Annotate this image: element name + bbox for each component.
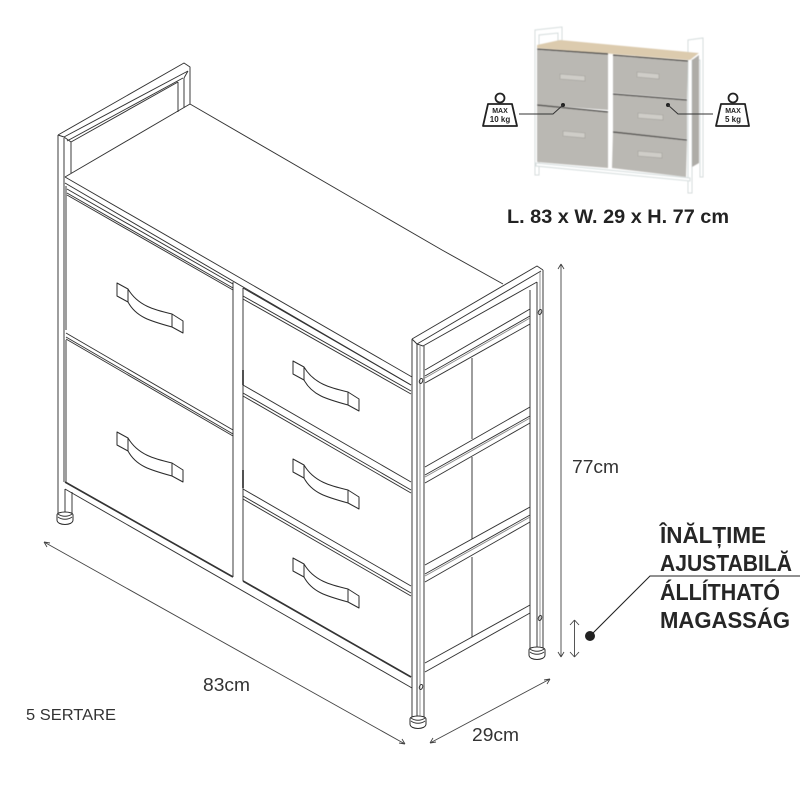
leader: 5 kg: [666, 103, 713, 114]
callout: adjustable height text: ÁLLÍTHATÓ: [660, 578, 780, 605]
leader: 10 kg: [519, 103, 565, 114]
photo: wooden top: [537, 40, 699, 60]
weight icon: max 5 kg: MAX: [725, 108, 741, 115]
illustration: drawer unit line drawing: [57, 63, 545, 728]
adjustable height arrow: [570, 620, 579, 657]
callout: adjustable height text: AJUSTABILĂ: [660, 549, 792, 576]
centre post: [233, 282, 243, 581]
foot: rear right: [529, 647, 545, 660]
right column drawers: [243, 288, 411, 596]
weight icon: max 10 kg: [483, 94, 517, 126]
bottom rail: [65, 482, 412, 688]
weight icon: max 10 kg: 10 kg: [490, 115, 510, 124]
left top rail: [58, 63, 190, 173]
dimension label: 77cm: 77cm: [572, 457, 619, 477]
product dimensions text: L. 83 x W. 29 x H. 77 cm: [507, 207, 729, 228]
callout leader with dot: [585, 576, 800, 641]
handle: upper left drawer: [117, 283, 183, 333]
handle: lower left drawer: [117, 432, 183, 482]
top surface: [65, 104, 530, 385]
product photo: [535, 27, 703, 193]
handle: middle right drawer: [293, 459, 359, 509]
dimension arrow: depth 29cm: [430, 679, 550, 743]
handle: lower right drawer: [293, 558, 359, 608]
foot: rear left: [57, 512, 73, 524]
left column drawers: [66, 189, 233, 436]
weight icon: max 5 kg: 5 kg: [725, 115, 741, 124]
label: 5 drawers: 5 SERTARE: [26, 707, 116, 724]
handle: upper right drawer: [293, 361, 359, 411]
weight icon: max 10 kg: MAX: [492, 108, 508, 115]
callout: adjustable height text: [659, 521, 792, 633]
dimension arrow: height 77cm: [558, 264, 564, 657]
frame holes: [419, 309, 542, 690]
weight icon: max 5 kg: [716, 94, 749, 126]
photo: white frame: [535, 27, 703, 193]
dimension arrow: width 83cm: [44, 542, 405, 744]
photo: drawers: [537, 49, 688, 177]
right side frame: [412, 266, 543, 717]
photo: drawer handles: [560, 72, 663, 158]
callout: adjustable height text: MAGASSÁG: [660, 606, 790, 633]
photo: drawer edges: [537, 49, 688, 140]
callout: adjustable height text: ÎNĂLȚIME: [659, 521, 766, 548]
dimension label: 83cm: 83cm: [203, 675, 250, 695]
left post and leg: [58, 135, 72, 515]
dimension label: 29cm: 29cm: [472, 725, 519, 745]
foot: front right: [410, 716, 426, 728]
photo: side panel: [692, 55, 699, 167]
